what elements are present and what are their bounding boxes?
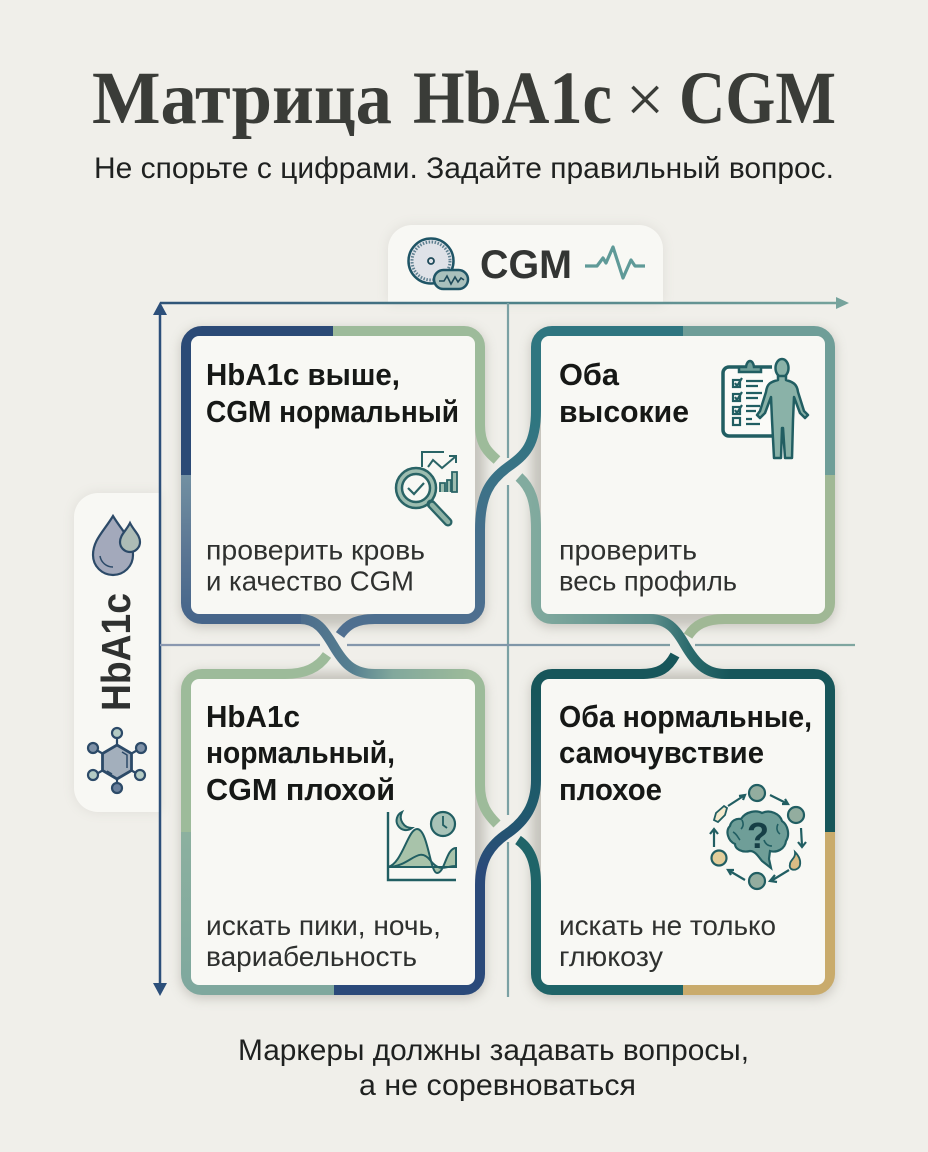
heading: нормальный,	[206, 735, 395, 770]
body text: проверить	[559, 534, 697, 566]
title	[92, 57, 836, 140]
body text: искать пики, ночь,	[206, 910, 441, 941]
footer note: Маркеры должны задавать вопросы,	[238, 1034, 749, 1067]
heading: Оба нормальные,	[559, 699, 812, 734]
icon: magnifier with chart	[396, 452, 457, 522]
icon: pulse wave	[585, 247, 645, 278]
axis: HbA1c vertical arrow	[153, 302, 167, 996]
tab shadows	[74, 225, 663, 812]
heading: высокие	[559, 394, 689, 429]
heading: самочувствие	[559, 735, 764, 770]
body text: искать не только	[559, 910, 776, 941]
panel: both normal, feeling bad	[541, 679, 825, 985]
title: HbA1c	[413, 57, 612, 140]
panel: HbA1c high, CGM normal	[191, 336, 475, 614]
heading	[206, 699, 395, 807]
HbA1c axis label: HbA1c	[93, 593, 139, 711]
card shadows	[181, 329, 835, 998]
heading	[559, 699, 812, 807]
matrix centre lines	[160, 303, 855, 997]
panel: CGM axis tab	[388, 225, 663, 303]
heading: CGM нормальный	[206, 394, 459, 429]
title: CGM	[679, 57, 836, 140]
body text	[206, 534, 425, 596]
heading: HbA1c выше,	[206, 357, 400, 392]
body text: вариабельность	[206, 941, 417, 972]
icon: blood drops	[93, 516, 140, 575]
CGM axis label: CGM	[480, 243, 572, 287]
subtitle: Не спорьте с цифрами. Задайте правильный вопрос.	[94, 152, 834, 185]
heading	[559, 357, 689, 429]
body text: весь профиль	[559, 566, 737, 596]
body text	[559, 534, 737, 596]
body text: и качество CGM	[206, 566, 414, 596]
icon: molecule	[88, 728, 146, 793]
panel: HbA1c axis tab	[74, 493, 160, 812]
heading: плохое	[559, 772, 662, 807]
body text	[559, 910, 776, 972]
footer note: а не соревноваться	[359, 1069, 636, 1102]
icon: night chart	[388, 812, 456, 880]
heading	[206, 357, 459, 429]
body text: глюкозу	[559, 941, 663, 972]
axis: CGM horizontal arrow	[160, 297, 849, 309]
heading: CGM плохой	[206, 772, 395, 807]
icon: brain with cycle: ?	[747, 815, 769, 856]
footer note	[238, 1034, 749, 1102]
icon: clipboard and human body	[723, 359, 808, 458]
icon: brain with cycle	[710, 785, 806, 889]
title: ×	[626, 61, 664, 137]
heading: Оба	[559, 357, 620, 392]
heading: HbA1c	[206, 699, 300, 734]
title: Матрица	[92, 57, 392, 140]
body text: проверить кровь	[206, 534, 425, 566]
icon: CGM sensor	[408, 238, 468, 289]
woven card borders	[186, 331, 830, 990]
body text	[206, 910, 441, 972]
panel: both high	[541, 336, 825, 614]
panel: HbA1c normal, CGM bad	[191, 679, 475, 985]
